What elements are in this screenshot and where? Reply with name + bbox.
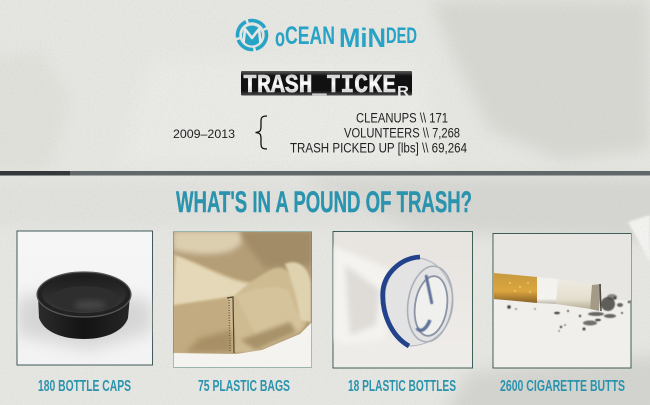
- label: 180 bottle caps: 180 BOTTLE CAPS: [38, 378, 131, 395]
- heading: WHAT'S IN A POUND OF TRASH?: [176, 186, 472, 219]
- photo: cigarette butt: [493, 234, 631, 368]
- stat: volunteers: VOLUNTEERS \\ 7,268: [344, 126, 460, 140]
- label: 18 plastic bottles: 18 PLASTIC BOTTLES: [348, 378, 456, 395]
- panel: plastic bags: [173, 231, 312, 395]
- logo wordmark: CEAN: [285, 22, 335, 50]
- label: 75 plastic bags: 75 PLASTIC BAGS: [198, 378, 290, 395]
- divider: [0, 171, 650, 176]
- photo: plastic bottle: [333, 232, 472, 368]
- icon: Ocean Minded emblem: [238, 20, 266, 50]
- ticker banner: Trash Ticker: R: [397, 82, 409, 98]
- logo wordmark: [275, 22, 417, 53]
- stats: cleanups, volunteers, trash picked up: [290, 110, 467, 156]
- ticker banner: Trash Ticker: TRASH_TICKE: [243, 70, 396, 100]
- photo: plastic bag: [173, 231, 312, 368]
- brace: [256, 116, 267, 149]
- panel: plastic bottles: [333, 232, 472, 395]
- logo wordmark: o: [275, 22, 285, 52]
- stat: trash picked up: TRASH PICKED UP [lbs] \\ 69,264: [290, 140, 467, 156]
- logo wordmark: MiN: [339, 23, 386, 53]
- logo wordmark: DED: [386, 23, 417, 48]
- logo: Ocean Minded: [238, 20, 417, 53]
- stat: cleanups: CLEANUPS \\ 171: [356, 110, 448, 126]
- date range: 2009–2013: [173, 127, 235, 141]
- panel: cigarette butts: [493, 234, 631, 395]
- panel: bottle caps: [17, 231, 152, 395]
- photo: bottle cap: [17, 231, 152, 365]
